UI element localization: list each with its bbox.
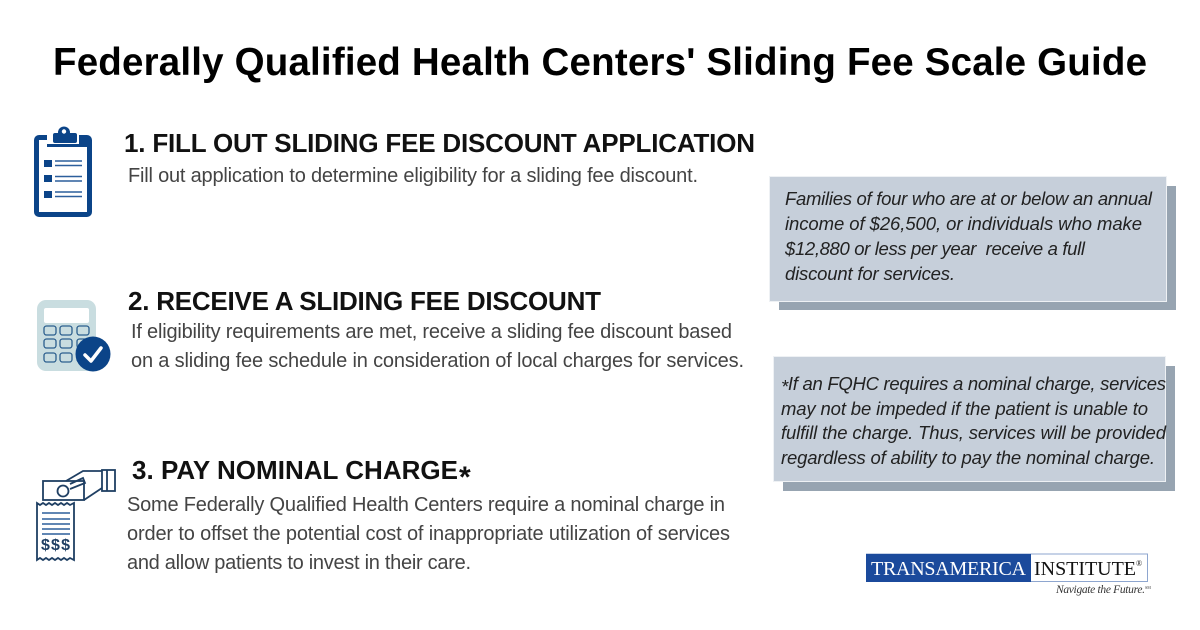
asterisk: * — [459, 461, 471, 494]
logo: Transamerica Institute — [866, 554, 1151, 596]
heading: step 3: 3. PAY NOMINAL CHARGE — [132, 455, 458, 485]
text: step 3 description: and allow patients to invest in their care. — [127, 552, 471, 574]
title: Federally Qualified Health Centers' Sliding Fee Scale Guide — [53, 41, 1147, 84]
text: step 2 description: on a sliding fee schedule in consideration of local charges for services. — [131, 350, 744, 372]
text: step 2 description: If eligibility requirements are met, receive a sliding fee discount based — [131, 321, 732, 343]
callout: full discount: income of $26,500, or individuals who make — [785, 213, 1142, 234]
text: step 3 description: order to offset the potential cost of inappropriate utilization of services — [127, 523, 730, 545]
callout: nominal charge footnote: * — [781, 376, 789, 397]
icon: clipboard — [34, 126, 92, 217]
icon label: receipt dollar signs: $$$ — [41, 537, 70, 554]
logo: Transamerica Institute: TRANSAMERICA — [871, 558, 1027, 580]
callout: full discount — [770, 176, 1176, 310]
callout: full discount: Families of four who are at or below an annual — [785, 188, 1153, 209]
logo: Transamerica Institute: SM — [1145, 585, 1151, 590]
callout: full discount: discount for services. — [785, 263, 955, 284]
icon: calculator with check — [37, 300, 110, 372]
callout: nominal charge footnote: regardless of ability to pay the nominal charge. — [781, 447, 1155, 468]
logo: Transamerica Institute: INSTITUTE — [1034, 558, 1136, 580]
text: step 2 description — [131, 321, 744, 372]
text: step 1 description: Fill out application to determine eligibility for a sliding fee discount. — [128, 165, 698, 187]
text: step 3 description — [127, 494, 730, 574]
logo: Transamerica Institute: Navigate the Future. — [1055, 584, 1145, 596]
callout: full discount: $12,880 or less per year receive a full — [784, 238, 1086, 259]
callout: nominal charge footnote: fulfill the charge. Thus, services will be provided — [781, 422, 1167, 443]
icon: hand paying with receipt — [37, 470, 115, 560]
logo: Transamerica Institute: ® — [1136, 559, 1142, 568]
text: step 3 description: Some Federally Qualified Health Centers require a nominal charge in — [127, 494, 725, 516]
heading: step 2: 2. RECEIVE A SLIDING FEE DISCOUNT — [128, 286, 601, 316]
callout: nominal charge footnote: If an FQHC requires a nominal charge, services — [788, 373, 1166, 394]
callout: nominal charge footnote — [774, 356, 1175, 491]
heading: step 1: 1. FILL OUT SLIDING FEE DISCOUNT APPLICATION — [124, 128, 755, 158]
callout: nominal charge footnote: may not be impeded if the patient is unable to — [781, 398, 1148, 419]
